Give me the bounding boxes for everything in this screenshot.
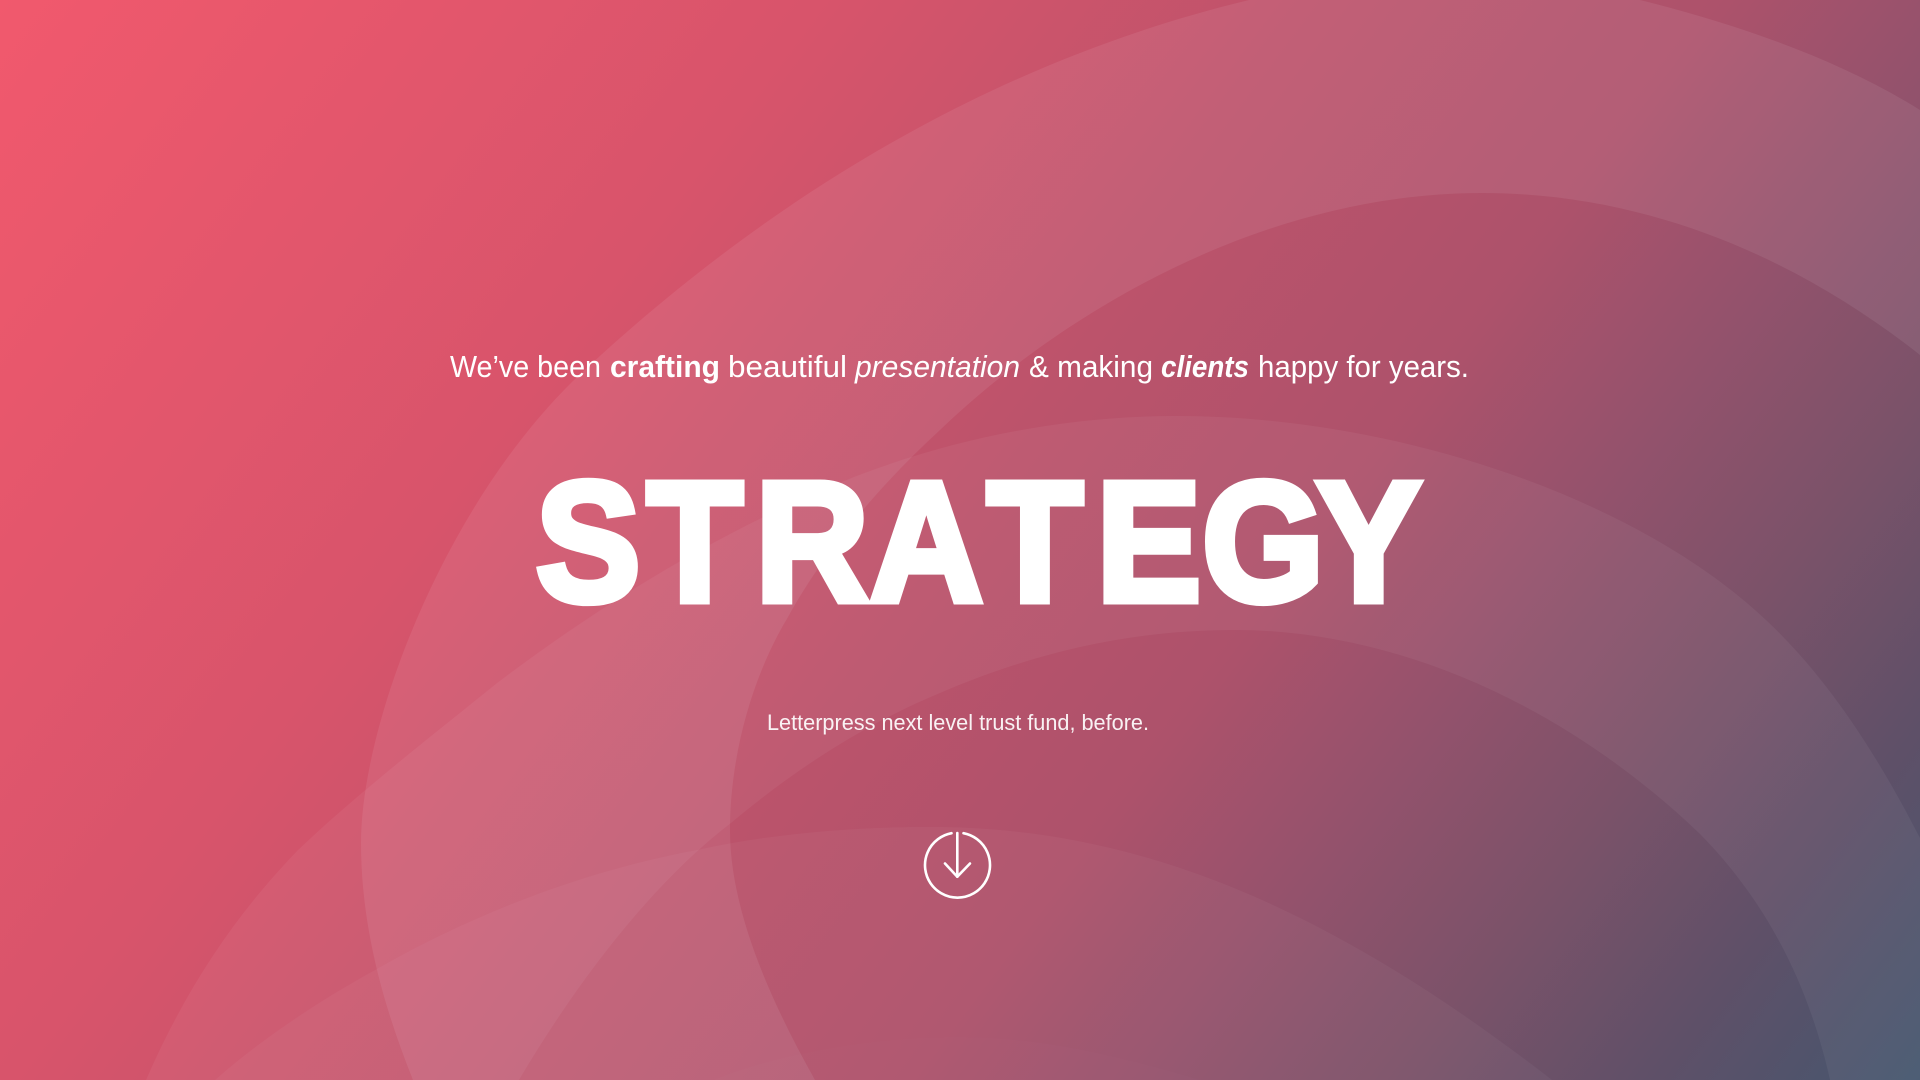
subtitle: Letterpress next level trust fund, before. xyxy=(767,710,1149,735)
tagline: crafting xyxy=(610,349,720,384)
main title: STRATEGY xyxy=(536,446,1421,637)
tagline: & making xyxy=(1029,349,1153,384)
faint bottom curved shape xyxy=(714,1037,1200,1080)
middle curved band xyxy=(146,416,1920,1080)
tagline xyxy=(450,349,1469,384)
lower curved shape xyxy=(215,827,1552,1080)
tagline: We’ve been xyxy=(450,349,601,384)
tagline: clients xyxy=(1161,349,1249,384)
tagline: happy for years. xyxy=(1258,349,1469,384)
icon: down arrow in circle xyxy=(925,833,990,898)
tagline: presentation xyxy=(854,349,1020,384)
tagline: beautiful xyxy=(728,349,847,384)
